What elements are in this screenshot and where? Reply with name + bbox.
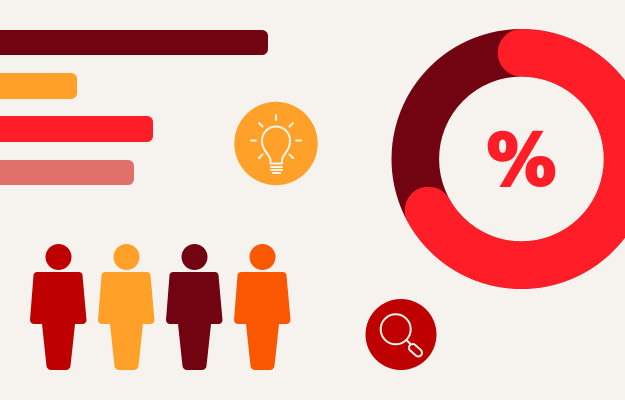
bar: orange: [0, 73, 77, 99]
bar: dark red: [0, 30, 268, 55]
bar: red: [0, 116, 153, 142]
person: red: [30, 244, 86, 370]
icon: magnifying glass: [366, 299, 436, 370]
person: orange: [98, 244, 154, 370]
person: dark red: [166, 244, 222, 370]
percent symbol: %: [487, 120, 556, 202]
icon: light bulb: [234, 102, 318, 185]
bar chart: [0, 30, 268, 185]
people icons: [30, 244, 290, 370]
person: deep orange: [234, 244, 290, 370]
donut: dark segment: [415, 53, 625, 265]
donut chart: [415, 53, 625, 265]
donut: red segment: [428, 53, 625, 265]
bar: salmon: [0, 160, 134, 185]
